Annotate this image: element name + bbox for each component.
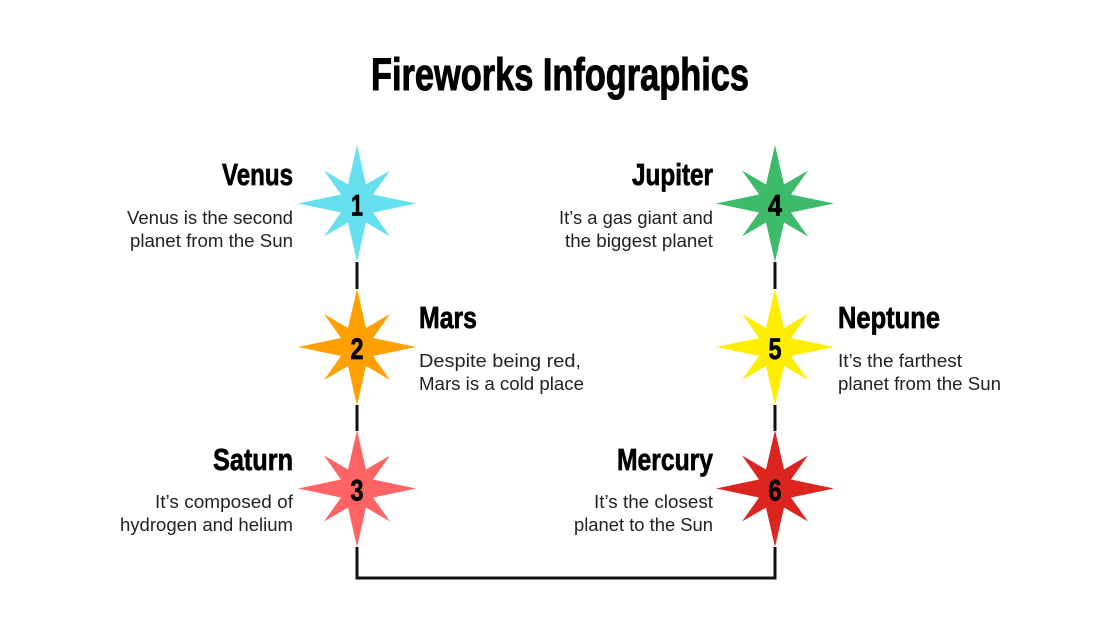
icon: star 4 <box>716 145 834 262</box>
item 4: Jupiter <box>559 145 834 262</box>
text: Jupiter description: the biggest planet <box>565 230 713 251</box>
text: Venus description: planet from the Sun <box>130 230 293 251</box>
text: Mercury description: It’s the closest <box>594 491 713 512</box>
heading: Neptune: Neptune <box>838 300 940 335</box>
item 3: Saturn <box>120 430 416 547</box>
item 1: Venus <box>127 145 416 262</box>
heading: Saturn: Saturn <box>213 442 293 477</box>
icon: star 3: 3 <box>350 474 364 508</box>
text: Mars description <box>419 350 584 394</box>
text: Mars description: Despite being red, <box>419 350 581 371</box>
icon: star 2 <box>298 288 416 406</box>
icon: star 3 <box>298 430 416 547</box>
icon: star 1 <box>298 145 416 262</box>
text: Saturn description: It’s composed of <box>155 491 294 512</box>
text: Neptune description: It’s the farthest <box>838 350 962 371</box>
icon: star 5 <box>716 288 834 406</box>
text: Saturn description: hydrogen and helium <box>120 514 293 535</box>
icon: star 6: 6 <box>768 474 782 508</box>
text: Mercury description: planet to the Sun <box>574 514 713 535</box>
icon: star 2: 2 <box>350 333 364 366</box>
icon: star 4: 4 <box>768 190 782 222</box>
item 6: Mercury <box>574 430 834 547</box>
text: Jupiter description: It’s a gas giant and <box>559 207 713 228</box>
text: Venus description <box>127 207 293 251</box>
text: Jupiter description <box>559 207 713 251</box>
text: Venus description: Venus is the second <box>127 207 293 228</box>
heading: Mars: Mars <box>419 300 477 335</box>
text: Neptune description: planet from the Sun <box>838 373 1001 394</box>
icon: star 1: 1 <box>351 190 363 222</box>
text: Mercury description <box>574 491 713 535</box>
text: Mars description: Mars is a cold place <box>419 373 584 394</box>
item 2: Mars <box>298 288 584 406</box>
title: Fireworks Infographics <box>371 49 749 100</box>
heading: Venus: Venus <box>222 157 293 192</box>
text: Neptune description <box>838 350 1001 394</box>
heading: Jupiter: Jupiter <box>632 157 713 192</box>
icon: star 6 <box>716 430 834 547</box>
item 5: Neptune <box>716 288 1001 406</box>
text: Saturn description <box>120 491 294 535</box>
connector lines <box>357 262 775 578</box>
heading: Mercury: Mercury <box>617 442 714 477</box>
icon: star 5: 5 <box>768 333 782 366</box>
